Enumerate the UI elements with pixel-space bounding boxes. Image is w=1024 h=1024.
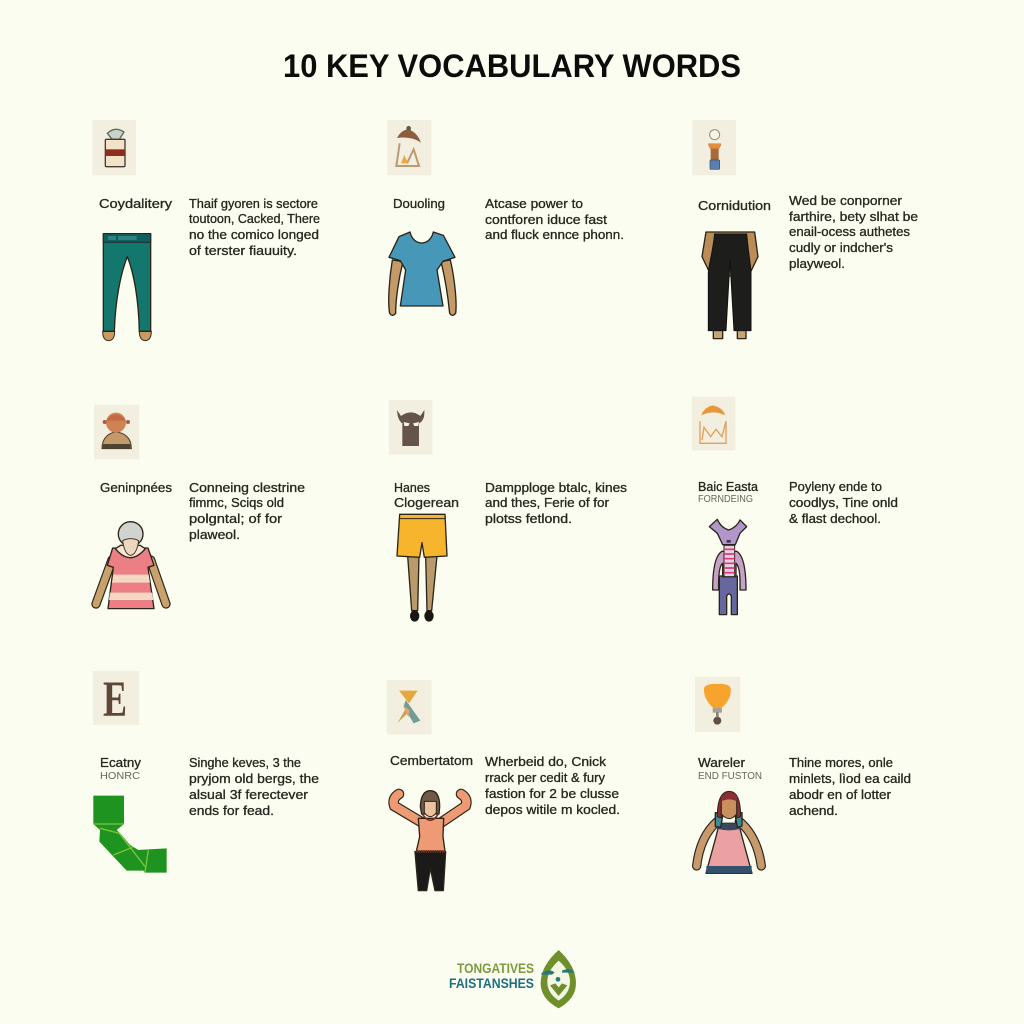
description: Atcase power to (485, 197, 583, 211)
panel: Baic Easta (692, 397, 898, 615)
description: cudly or indcher's (789, 241, 893, 255)
panel: Cembertatom (387, 680, 620, 891)
word label: FORNDEING (698, 493, 753, 505)
description: rrack per cedit & fury (485, 771, 606, 785)
word label: Wareler (698, 756, 745, 770)
icon: orange crown tile (692, 397, 735, 450)
description: no the comico longed (189, 228, 319, 242)
logo emblem (541, 950, 576, 1008)
description: Poyleny ende to (789, 480, 882, 494)
icon: hat tile (387, 120, 431, 175)
logo wordmark (449, 961, 534, 991)
description: & flast dechool. (789, 512, 881, 526)
panel: Wareler (695, 677, 911, 873)
description: minlets, lìod ea caild (789, 772, 911, 786)
word label: Baic Easta (698, 480, 758, 494)
panel: Hanes Clogerean (389, 400, 627, 622)
description: coodlys, Tine onld (789, 496, 898, 510)
description: enail-ocess authetes (789, 225, 910, 239)
logo (449, 950, 576, 1008)
word label: Coydalitery (99, 197, 173, 211)
panel: Cornidution (692, 120, 918, 339)
figure: flexing person (394, 791, 466, 891)
panel: Geninpnées (94, 405, 305, 609)
word label: HONRC (100, 770, 140, 782)
description: Singhe keves, 3 the (189, 756, 301, 770)
word label: Cornidution (698, 199, 771, 213)
description: Dampploge btalc, kines (485, 481, 627, 495)
description (789, 480, 898, 526)
word label: Geninpnées (100, 481, 172, 495)
description: achend. (789, 804, 838, 818)
word label: Cembertatom (390, 754, 473, 768)
word label: Ecatny (100, 756, 142, 770)
description: contforen iduce fast (485, 213, 608, 227)
description: abodr en of lotter (789, 788, 891, 802)
figure: green trousers (103, 234, 151, 341)
word label: Hanes (394, 481, 430, 495)
icon: bottle tile (92, 120, 136, 175)
word label: Douoling (393, 197, 445, 211)
description (485, 755, 620, 817)
icon: lamp tile (692, 120, 736, 175)
figure: purple creature (709, 519, 747, 615)
description: Wed be conporner (789, 194, 902, 208)
logo wordmark: TONGATIVES (457, 961, 534, 976)
description (485, 481, 627, 526)
panel: Ecatny (93, 671, 319, 873)
figure: person in pink dress (697, 791, 761, 873)
icon: bull mask tile (389, 400, 432, 455)
word label (394, 481, 459, 510)
icon: crossed shape tile (387, 680, 432, 735)
figure: blue shirt (389, 232, 456, 315)
logo wordmark: FAISTANSHES (449, 976, 534, 991)
description: Wherbeid do, Cnick (485, 755, 607, 769)
word label: Clogerean (394, 496, 459, 510)
icon: light bulb tile (695, 677, 740, 732)
description: and fluck ennce phonn. (485, 228, 624, 242)
description: and thes, Ferie of for (485, 496, 609, 510)
description: playweol. (789, 257, 845, 271)
description: depos witile m kocled. (485, 803, 620, 817)
word label (100, 756, 142, 782)
description: Conneing clestrine (189, 481, 305, 495)
word label: END FUSTON (698, 770, 762, 782)
icon: monkey face tile (94, 405, 139, 459)
figure: person in striped top (96, 522, 166, 609)
figure: black trousers with arms (702, 232, 758, 339)
description (485, 197, 624, 242)
word label (698, 756, 762, 782)
description (789, 194, 918, 271)
description: plotss fetlond. (485, 512, 572, 526)
description: polgntal; of for (189, 512, 282, 526)
description: fimmc, Sciqs old (189, 496, 284, 510)
description: toutoon, Cacked, There (189, 212, 320, 226)
title: 10 KEY VOCABULARY WORDS (283, 48, 741, 84)
description: pryjom old bergs, the (189, 772, 319, 786)
description: of terster fiauuity. (189, 244, 297, 258)
figure: green map shape (93, 796, 167, 873)
panel: Coydalitery (92, 120, 320, 341)
word label (698, 480, 758, 505)
description: Thaif gyoren is sectore (189, 197, 318, 211)
panel: Douoling (387, 120, 624, 315)
description: farthire, bety slhat be (789, 210, 918, 224)
description: fastion for 2 be clusse (485, 787, 619, 801)
description (189, 756, 319, 818)
description (189, 481, 305, 542)
description (189, 197, 320, 258)
description: plaweol. (189, 528, 240, 542)
description: ends for fead. (189, 804, 274, 818)
icon: letter E tile: E (103, 672, 127, 728)
description: Thine mores, onle (789, 756, 893, 770)
description: alsual 3f ferectever (189, 788, 308, 802)
figure: yellow shorts (397, 514, 447, 622)
description (789, 756, 911, 818)
